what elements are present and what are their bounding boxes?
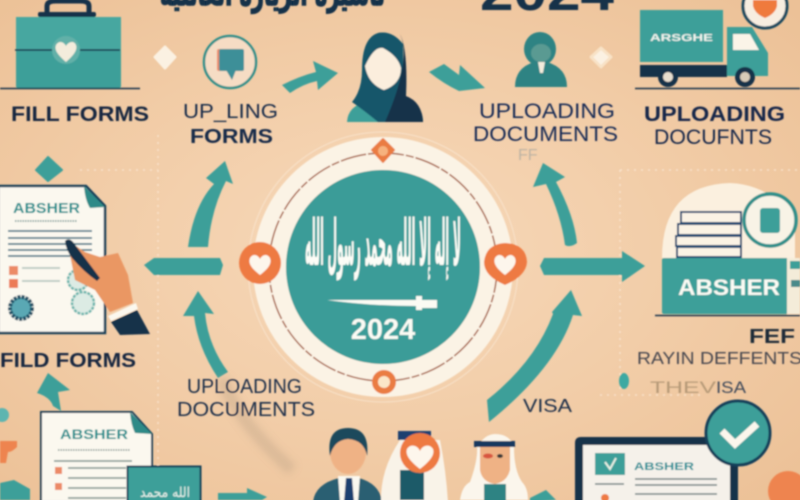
icon: absher box with books <box>655 183 800 316</box>
label: uploading docufnts: DOCUFNTS <box>654 126 772 149</box>
icon: cream diamond left <box>155 47 175 68</box>
arrow: small teal up <box>37 373 70 411</box>
icon: orange badge <box>768 471 800 500</box>
icon: left edge fragments <box>0 408 30 500</box>
label: fee paying text: ISA <box>716 378 747 397</box>
books <box>676 212 741 257</box>
icon: laptop <box>575 437 738 500</box>
arrow: upper left arc <box>188 161 233 247</box>
icon: truck <box>635 10 800 88</box>
label: uploading documents center <box>473 100 618 146</box>
document title: ABSHER <box>13 201 81 217</box>
arrow: to woman <box>282 61 338 93</box>
label: uploading forms: UP_LING <box>183 101 278 123</box>
document: absher form with hand <box>0 186 150 335</box>
figure: person in headdress <box>460 434 528 500</box>
teal disc <box>286 170 480 364</box>
title <box>160 0 614 21</box>
icon: check badge <box>706 401 770 465</box>
seal <box>744 194 796 246</box>
arrow: horizontal left <box>144 258 223 275</box>
icon: woman in hijab <box>347 32 423 122</box>
year: 2024 <box>351 314 415 346</box>
label: uploading documents center: DOCUMENTS <box>473 123 618 146</box>
arrow: bottom center <box>530 490 556 500</box>
figure: person with heart badge <box>381 431 448 500</box>
green card <box>128 466 200 500</box>
node: top <box>372 139 394 162</box>
label: fill forms: FILL FORMS <box>11 103 149 126</box>
lower form title: ABSHER <box>60 427 128 442</box>
box label: ABSHER <box>678 275 780 300</box>
label: uploading docufnts: UPLOADING <box>644 103 785 126</box>
dashed ring <box>269 153 497 381</box>
arrow: bottom left <box>218 488 267 500</box>
label: uploading documents lower: DOCUMENTS <box>177 399 315 421</box>
label: uploading forms: FORMS <box>190 126 273 148</box>
label: uploading documents lower <box>177 376 315 421</box>
label: uploading forms <box>183 101 278 148</box>
label: uploading documents center: UPLOADING <box>479 100 615 123</box>
label: fee paying text: RAYIN DEFFENTS <box>637 348 800 368</box>
label: faded fee: FF <box>518 147 538 164</box>
arrow: lower right arc <box>487 290 582 422</box>
cream ring <box>270 154 496 380</box>
cuff <box>108 303 138 321</box>
label: visa: VISA <box>523 396 572 416</box>
arrow: upper right arc <box>533 163 577 246</box>
sword <box>327 296 437 310</box>
node: bottom <box>372 370 396 394</box>
badge: orange shield <box>743 0 787 28</box>
icon: briefcase <box>0 1 140 88</box>
label: uploading docufnts <box>644 103 785 149</box>
truck label: ARSGHE <box>650 33 713 44</box>
arrow: lower left arc <box>183 291 292 470</box>
label: fild forms: FILD FORMS <box>0 349 136 372</box>
icon: teal blob <box>619 373 629 389</box>
figure: man in suit <box>313 428 382 500</box>
arrow: from woman <box>429 64 485 91</box>
icon: form circle <box>204 36 256 88</box>
node: right heart <box>484 243 527 285</box>
label: uploading documents lower: UPLOADING <box>187 376 302 398</box>
node: left heart <box>239 242 281 284</box>
icon: cream diamond right <box>591 48 611 67</box>
icon: person <box>515 32 567 87</box>
hand <box>67 240 133 312</box>
laptop title: ABSHER <box>634 461 694 473</box>
label: fee paying text: FEF <box>749 326 795 348</box>
center emblem <box>239 132 527 402</box>
label: fee paying text <box>637 326 800 397</box>
icon: teal diamond <box>36 157 62 181</box>
document: absher lower form <box>41 412 200 500</box>
label: fee paying text: THEV <box>650 378 717 397</box>
arrow: horizontal right <box>540 251 645 282</box>
